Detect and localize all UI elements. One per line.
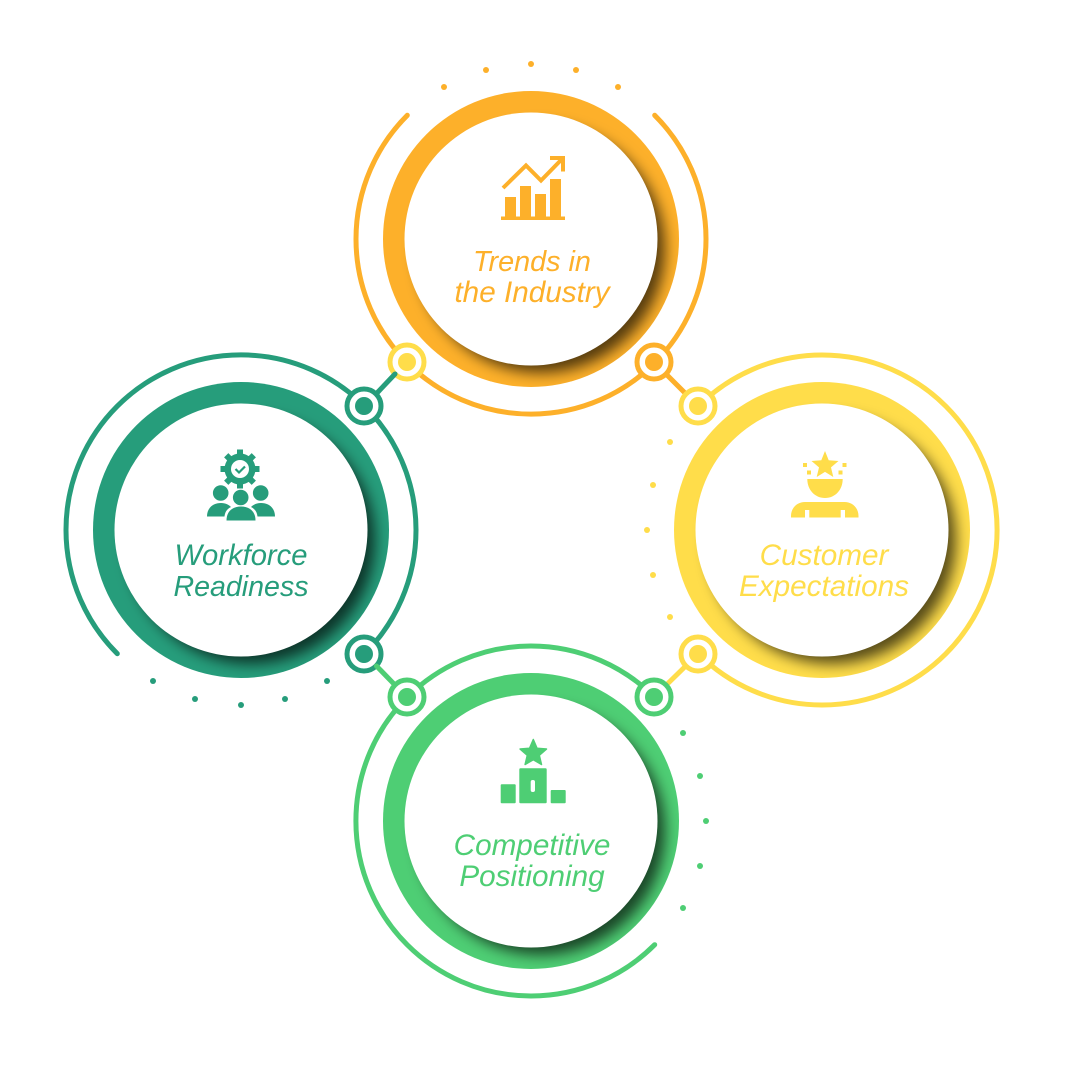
node: orange arc, orange xyxy=(637,345,671,379)
white disc: yellow xyxy=(696,404,948,656)
dotted arc: orange xyxy=(441,61,621,90)
node: dark green arc, top xyxy=(347,389,381,423)
thick ring: light green xyxy=(383,673,679,969)
thick ring: orange xyxy=(383,91,679,387)
ring shadow: dark green xyxy=(127,416,375,664)
node: orange arc, yellow xyxy=(390,345,424,379)
ring shadow: light green xyxy=(417,707,665,955)
icon: team with gear and check xyxy=(207,441,275,520)
outer arc: yellow xyxy=(698,355,997,705)
dotted arc: yellow xyxy=(644,439,673,620)
label: Competitive Positioning: Competitive xyxy=(454,829,610,862)
label: Customer Expectations: Expectations xyxy=(739,570,909,603)
label: Customer Expectations: Customer xyxy=(760,539,889,572)
panel: Customer Expectations xyxy=(644,355,997,705)
outer arc: light green xyxy=(356,646,655,996)
connector: orange to yellow xyxy=(654,362,698,406)
node: light green arc, left xyxy=(390,680,424,714)
outer arc: dark green xyxy=(66,355,416,654)
label: Trends in the Industry: Trends in xyxy=(473,246,591,278)
thick ring: dark green xyxy=(93,382,389,678)
node: light green arc, right xyxy=(637,680,671,714)
white disc: orange xyxy=(404,112,658,366)
ring shadow: yellow xyxy=(708,416,956,664)
white disc: dark green xyxy=(114,404,368,656)
dotted arc: dark green xyxy=(150,678,330,708)
connector: dark green to yellow node xyxy=(377,374,395,393)
label: Workforce Readiness: Readiness xyxy=(173,571,309,603)
panel: Trends in the Industry xyxy=(356,61,706,414)
label: Workforce Readiness: Workforce xyxy=(175,540,307,572)
connector: yellow to light green xyxy=(654,654,698,697)
dotted arc: light green xyxy=(680,730,709,911)
white disc: light green xyxy=(404,694,658,948)
panel: Competitive Positioning xyxy=(356,646,709,996)
node: yellow arc, bottom xyxy=(681,637,715,671)
panel: Workforce Readiness xyxy=(66,355,416,708)
icon: podium with star xyxy=(501,740,566,803)
ring shadow: orange xyxy=(417,125,665,373)
connector: light green to dark green node xyxy=(376,666,394,684)
thick ring: yellow xyxy=(674,382,970,678)
label: Competitive Positioning: Positioning xyxy=(459,860,605,893)
label: Trends in the Industry: the Industry xyxy=(454,276,612,309)
node: dark green arc, bottom xyxy=(347,637,381,671)
outer arc: orange xyxy=(356,115,706,414)
icon: customer with star xyxy=(791,451,858,518)
node: yellow arc, top xyxy=(681,389,715,423)
icon: bar chart with rising arrow xyxy=(501,156,565,220)
